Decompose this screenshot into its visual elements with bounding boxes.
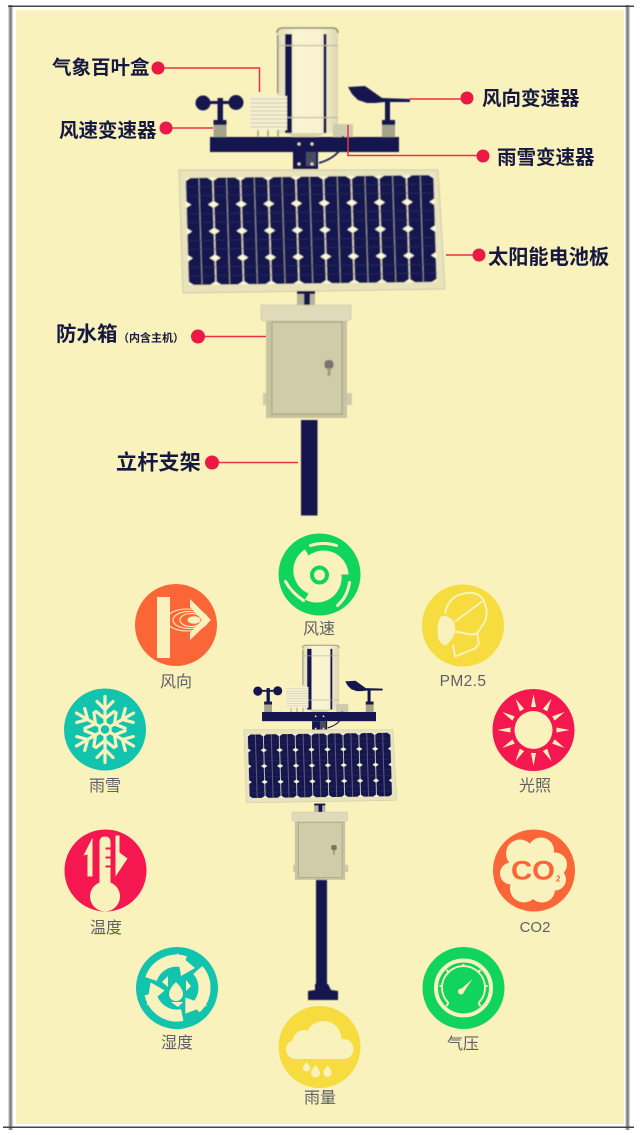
icon: CO2: CO: [511, 856, 555, 886]
label: 太阳能电池板: 太阳能电池板: [488, 246, 609, 269]
icon: air pressure: [422, 947, 504, 1029]
small station pole and base: [308, 880, 338, 1000]
caption: 湿度: 湿度: [161, 1034, 193, 1052]
caption: PM2.5: PM2.5: [440, 673, 486, 690]
caption: 气压: 气压: [447, 1035, 479, 1053]
caption: 雨量: 雨量: [304, 1090, 336, 1107]
label: 风速变速器: 风速变速器: [59, 119, 157, 142]
sensor assembly: [196, 28, 410, 169]
icon: temperature: [64, 830, 146, 912]
small station: sensor assembly: [253, 645, 383, 732]
label: 防水箱: 防水箱: [56, 323, 118, 346]
caption: 温度: 温度: [90, 919, 122, 937]
icon: rainfall: [278, 1006, 360, 1088]
small station: solar panel: [244, 730, 397, 803]
weather station: main photo: [179, 28, 445, 418]
caption: CO2: CO2: [520, 919, 550, 936]
small station: cabinet: [292, 804, 348, 880]
solar panel: [179, 170, 445, 293]
marker dots: [152, 62, 490, 470]
label: 气象百叶盒: 气象百叶盒: [52, 56, 150, 79]
caption: 雨雪: 雨雪: [89, 778, 121, 795]
label: 风向变速器: 风向变速器: [482, 87, 580, 110]
label: 雨雪变速器: 雨雪变速器: [497, 146, 595, 169]
icon: humidity: [136, 947, 218, 1029]
icon: sunlight: [492, 689, 574, 771]
icon: PM2.5 mask: [422, 584, 504, 666]
waterproof cabinet: [261, 291, 352, 418]
icon: rain and snow: [64, 688, 146, 770]
label: 内含主机: （内含主机）: [118, 330, 184, 344]
leader lines: [158, 68, 483, 462]
caption: 光照: 光照: [519, 777, 551, 795]
pole: [301, 420, 318, 516]
icon: wind speed: [278, 534, 360, 616]
caption: 风向: 风向: [160, 673, 192, 691]
label: 立杆支架: 立杆支架: [116, 450, 201, 474]
icon: CO2: [493, 830, 575, 912]
icon: wind direction: [135, 584, 217, 666]
caption: 风速: 风速: [303, 620, 335, 638]
icon: CO2: 2: [556, 874, 561, 884]
